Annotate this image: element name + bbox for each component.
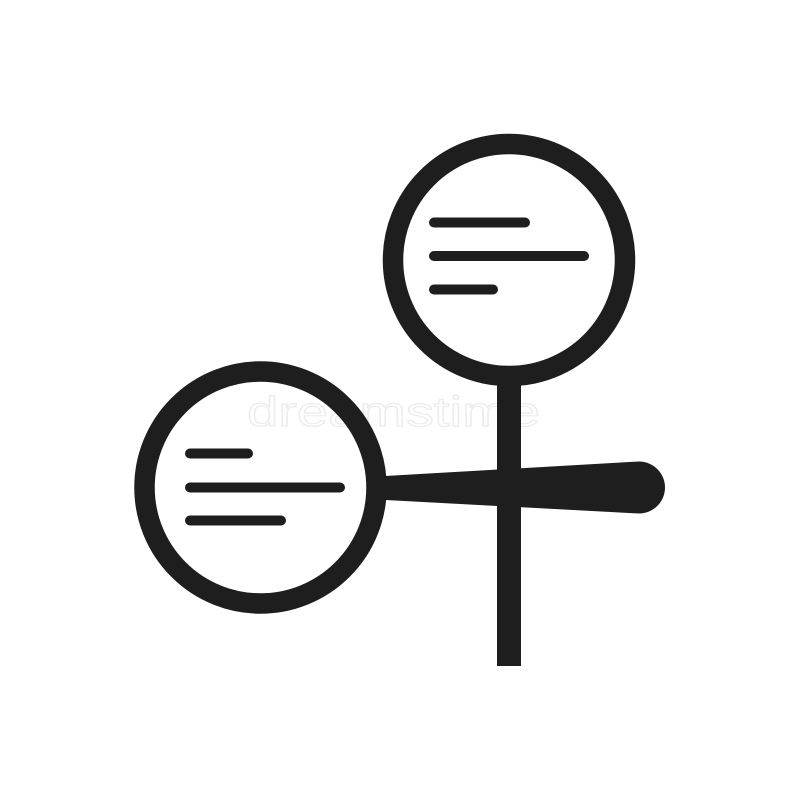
text lines: left lens bbox=[190, 454, 340, 520]
text lines: top lens bbox=[434, 222, 584, 290]
magnifying glass: vertical bbox=[393, 144, 625, 666]
vertical handle bbox=[497, 380, 521, 666]
lens ring: top bbox=[393, 144, 625, 376]
watermark: dreamstime bbox=[247, 388, 540, 435]
lens ring: left bbox=[144, 372, 376, 604]
horizontal tapered handle bbox=[380, 462, 665, 514]
magnifying glass: horizontal bbox=[144, 372, 665, 604]
